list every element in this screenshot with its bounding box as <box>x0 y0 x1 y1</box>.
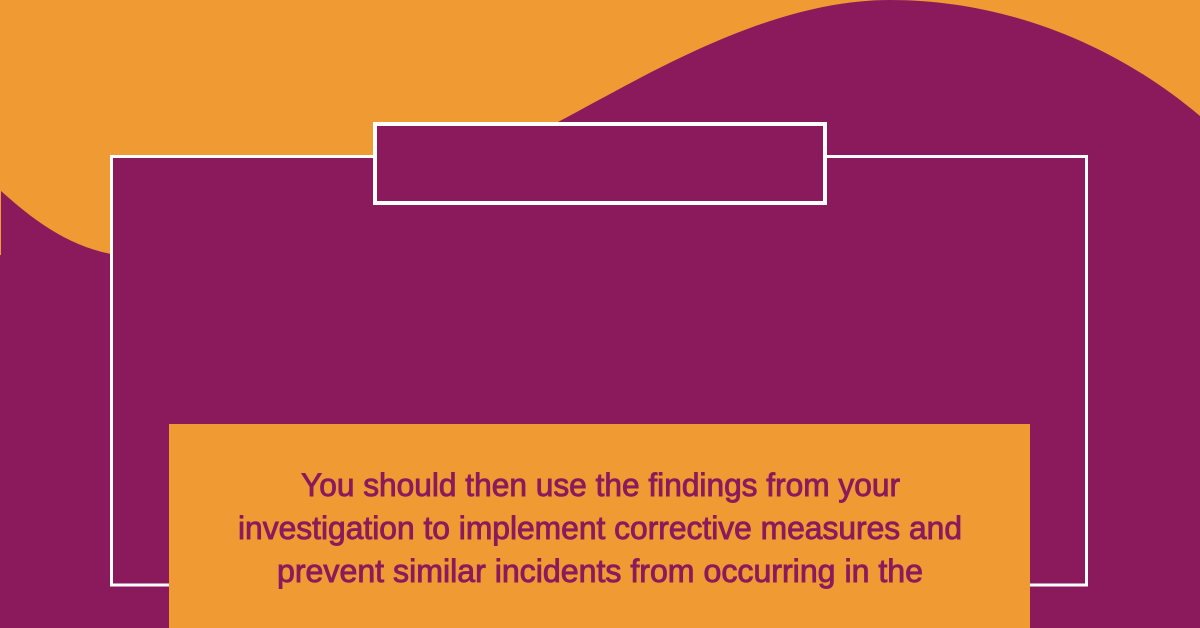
orange text panel <box>169 424 1030 628</box>
title box (empty) <box>375 124 825 203</box>
body text: You should then use the findings from your <box>301 467 900 503</box>
white outline frame <box>112 156 1086 585</box>
body text: prevent similar incidents from occurring in the <box>277 553 923 589</box>
body text <box>238 467 962 589</box>
body text: investigation to implement corrective measures and <box>238 510 962 546</box>
